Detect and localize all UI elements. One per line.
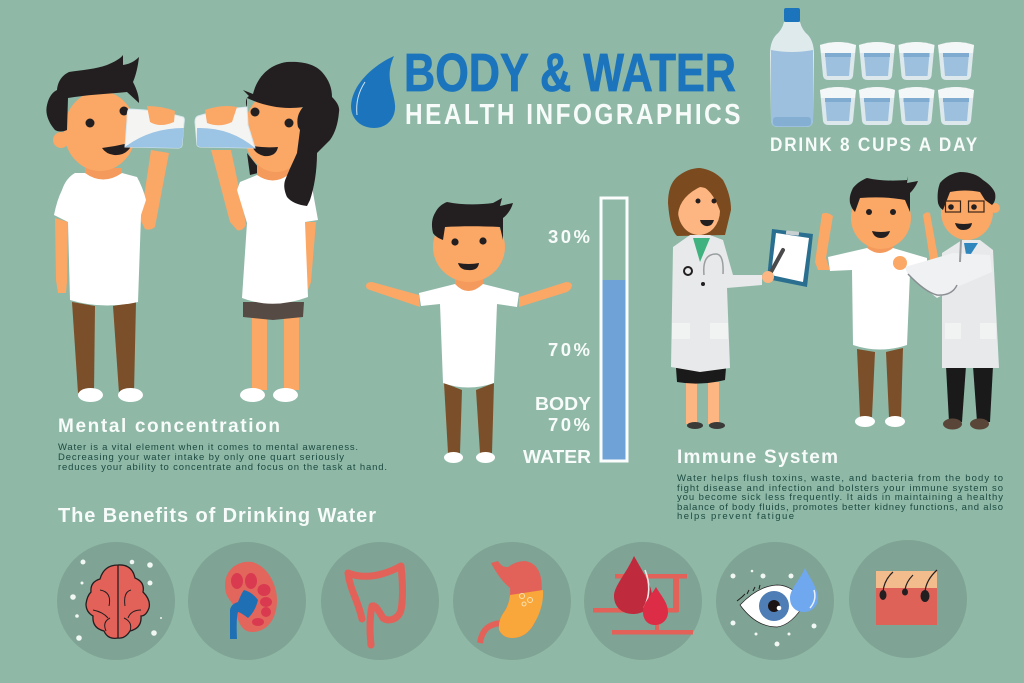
chart label: 70 percent: 70% <box>548 339 590 360</box>
man flexing with doctor <box>815 176 940 427</box>
heading: benefits of drinking water: The Benefits of Drinking Water <box>58 505 376 527</box>
woman drinking water <box>195 62 339 402</box>
chart label: body 70 percent: BODY <box>535 393 592 414</box>
icon: kidney <box>188 542 306 660</box>
icon: water drop logo <box>351 56 395 128</box>
text: mental concentration body: Water is a vital element when it comes to mental awareness. <box>58 442 358 453</box>
text: mental concentration body <box>58 442 387 473</box>
text: mental concentration body: reduces your ability to concentrate and focus on the task at hand. <box>58 462 387 473</box>
chart: body water level bar <box>601 198 627 461</box>
heading: immune system: Immune System <box>677 447 838 468</box>
subtitle: HEALTH INFOGRAPHICS <box>405 99 743 131</box>
chart label: water: WATER <box>523 446 591 467</box>
icon: skin with hair <box>849 540 967 658</box>
man with arms out <box>366 198 572 463</box>
man drinking water <box>46 55 184 402</box>
caption: drink 8 cups: DRINK 8 CUPS A DAY <box>770 135 979 156</box>
icon: eight glasses of water <box>820 42 974 125</box>
icon: brain <box>57 542 175 660</box>
icon: water bottle <box>770 8 814 127</box>
text: immune system body: Water helps flush toxins, waste, and bacteria from the body to <box>677 473 1003 484</box>
icon: eye with tear <box>716 542 834 660</box>
icon: blood drops <box>584 542 702 660</box>
text: immune system body: helps prevent fatigue <box>677 511 794 522</box>
female doctor <box>668 168 813 429</box>
text: immune system body: fight disease and infection and bolsters your immune system so <box>677 483 1003 494</box>
male doctor <box>893 172 1000 430</box>
title: body and water: BODY & WATER <box>404 43 736 103</box>
chart label: second 70 percent: 70% <box>548 414 590 435</box>
icon: large intestine <box>321 542 439 660</box>
text: immune system body <box>677 473 1003 522</box>
icon: stomach <box>453 542 571 660</box>
heading: mental concentration: Mental concentration <box>58 416 280 437</box>
chart label: 30 percent: 30% <box>548 226 590 247</box>
text: immune system body: balance of body fluids, promotes better kidney functions, and also <box>677 502 1003 513</box>
text: mental concentration body: Decreasing your water intake by only one quart seriously <box>58 452 344 463</box>
text: immune system body: you become sick less frequently. It aids in maintaining a healthy <box>677 492 1003 503</box>
